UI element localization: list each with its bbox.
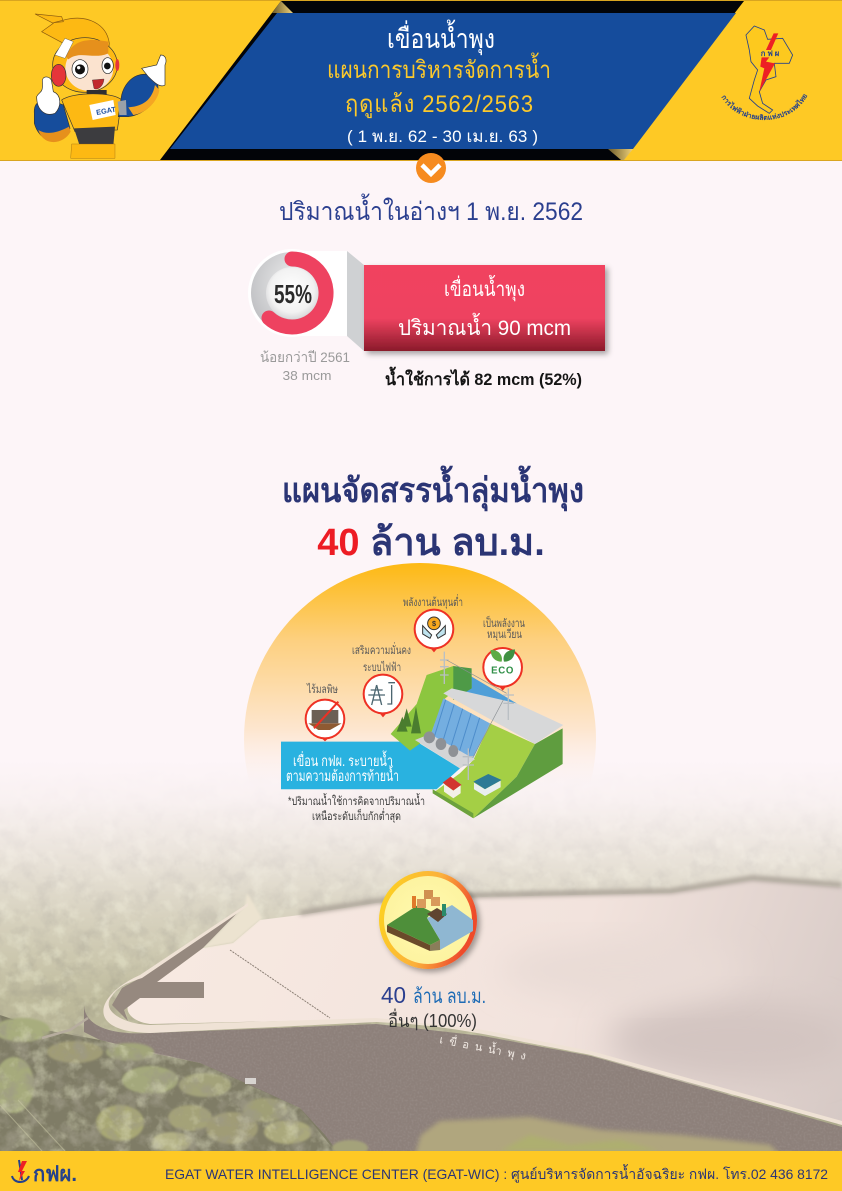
pylons and lines xyxy=(440,652,514,780)
comparison note: 38 mcm xyxy=(282,368,332,383)
comparison note: น้อยกว่าปี 2561 xyxy=(260,349,350,365)
houses xyxy=(443,777,462,791)
benefit labels: พลังงานต้นทุนต่ำ xyxy=(403,594,463,609)
meadow below dam xyxy=(415,1117,780,1155)
comparison note xyxy=(260,349,350,383)
gauge 55%: 55% xyxy=(274,279,312,309)
right hill xyxy=(433,723,535,818)
EGAT Thailand logo: การไฟฟ้าฝ่ายผลิตแห่งประเทศไทย xyxy=(721,94,808,120)
benefit labels: เสริมความมั่นคง xyxy=(352,642,411,657)
dam illustration xyxy=(281,610,563,818)
banner caption xyxy=(286,750,399,785)
left hill xyxy=(391,666,472,751)
footer logo: กฟผ. xyxy=(33,1163,77,1186)
EGAT Thailand logo xyxy=(721,26,808,120)
forest xyxy=(0,760,842,1151)
benefit labels: เป็นพลังงาน xyxy=(483,615,525,630)
sand bank xyxy=(203,893,262,948)
panel: dam storage xyxy=(248,249,605,389)
mascot xyxy=(34,14,166,158)
red info box: เขื่อนน้ำพุง xyxy=(444,275,525,302)
crest xyxy=(443,688,563,744)
header banner xyxy=(0,0,842,161)
title lines: ฤดูแล้ง 2562/2563 xyxy=(345,91,534,119)
powerhouse apron xyxy=(415,734,475,768)
footnote xyxy=(288,793,425,823)
title lines: เขื่อนน้ำพุง xyxy=(387,19,495,56)
benefit labels: ระบบไฟฟ้า xyxy=(363,661,401,674)
heading: water volume: ปริมาณน้ำในอ่างฯ 1 พ.ย. 2562 xyxy=(279,193,583,226)
title lines xyxy=(327,19,551,146)
footer text: EGAT WATER INTELLIGENCE CENTER (EGAT-WIC) : ศูนย์บริหารจัดการน้ำอัจฉริยะ กฟผ. โทร.02 436 8172 xyxy=(165,1164,828,1183)
benefit labels xyxy=(306,594,525,696)
chevron down badge xyxy=(416,153,446,183)
background photo: reservoir and dam xyxy=(0,760,842,1156)
footer logo xyxy=(12,1160,77,1186)
heading: allocation plan: 40 ล้าน ลบ.ม. xyxy=(317,522,545,564)
icon pins xyxy=(306,610,522,738)
icon: eco leaves xyxy=(491,649,515,677)
icon: transmission tower xyxy=(368,683,395,705)
banner caption: ตามความต้องการท้ายน้ำ xyxy=(286,765,399,785)
reservoir water xyxy=(128,880,842,1122)
benefit labels: ไร้มลพิษ xyxy=(306,683,338,696)
icon: eco leaves: ECO xyxy=(491,666,514,677)
banner caption: เขื่อน กฟผ. ระบายน้ำ xyxy=(293,750,393,770)
other uses value: อื่นๆ (100%) xyxy=(388,1008,477,1031)
EGAT Thailand logo: กฟผ xyxy=(761,49,781,58)
title lines: แผนการบริหารจัดการน้ำ xyxy=(327,52,551,84)
trees xyxy=(397,707,421,733)
dam downstream face xyxy=(84,1005,842,1151)
gauge 55% xyxy=(248,249,336,337)
access road xyxy=(42,1018,88,1038)
icon: other uses xyxy=(379,871,477,969)
footnote: *ปริมาณน้ำใช้การคิดจากปริมาณน้ำ xyxy=(288,793,425,808)
blue release banner xyxy=(281,742,460,789)
heading: allocation plan: แผนจัดสรรน้ำลุ่มน้ำพุง xyxy=(282,465,584,512)
dam lettering: เขื่อนน้ำพุง xyxy=(438,1031,533,1064)
sun semicircle backdrop xyxy=(244,563,596,915)
icon: coin in hands: $ xyxy=(432,619,436,628)
dam crest road xyxy=(103,903,842,1125)
benefit labels: หมุนเวียน xyxy=(487,628,522,641)
heading: allocation plan xyxy=(282,465,584,564)
title lines: ( 1 พ.ย. 62 - 30 เม.ย. 63 ) xyxy=(347,127,538,146)
upstream dam slope xyxy=(112,905,245,1021)
spillway xyxy=(430,698,490,758)
other uses value xyxy=(381,982,486,1031)
icon: coin in hands xyxy=(423,617,445,638)
footer bar xyxy=(0,1151,842,1191)
other uses value: 40 xyxy=(381,982,406,1008)
footnote: เหนือระดับเก็บกักต่ำสุด xyxy=(312,808,401,823)
mascot: EGAT xyxy=(95,105,117,117)
other uses value: ล้าน ลบ.ม. xyxy=(413,986,486,1008)
usable water: น้ำใช้การได้ 82 mcm (52%) xyxy=(385,366,582,389)
icon: no pollution xyxy=(308,702,342,730)
lower left tree canopy xyxy=(0,1015,340,1155)
red info box: ปริมาณน้ำ 90 mcm xyxy=(398,313,571,340)
red info box xyxy=(364,265,605,351)
